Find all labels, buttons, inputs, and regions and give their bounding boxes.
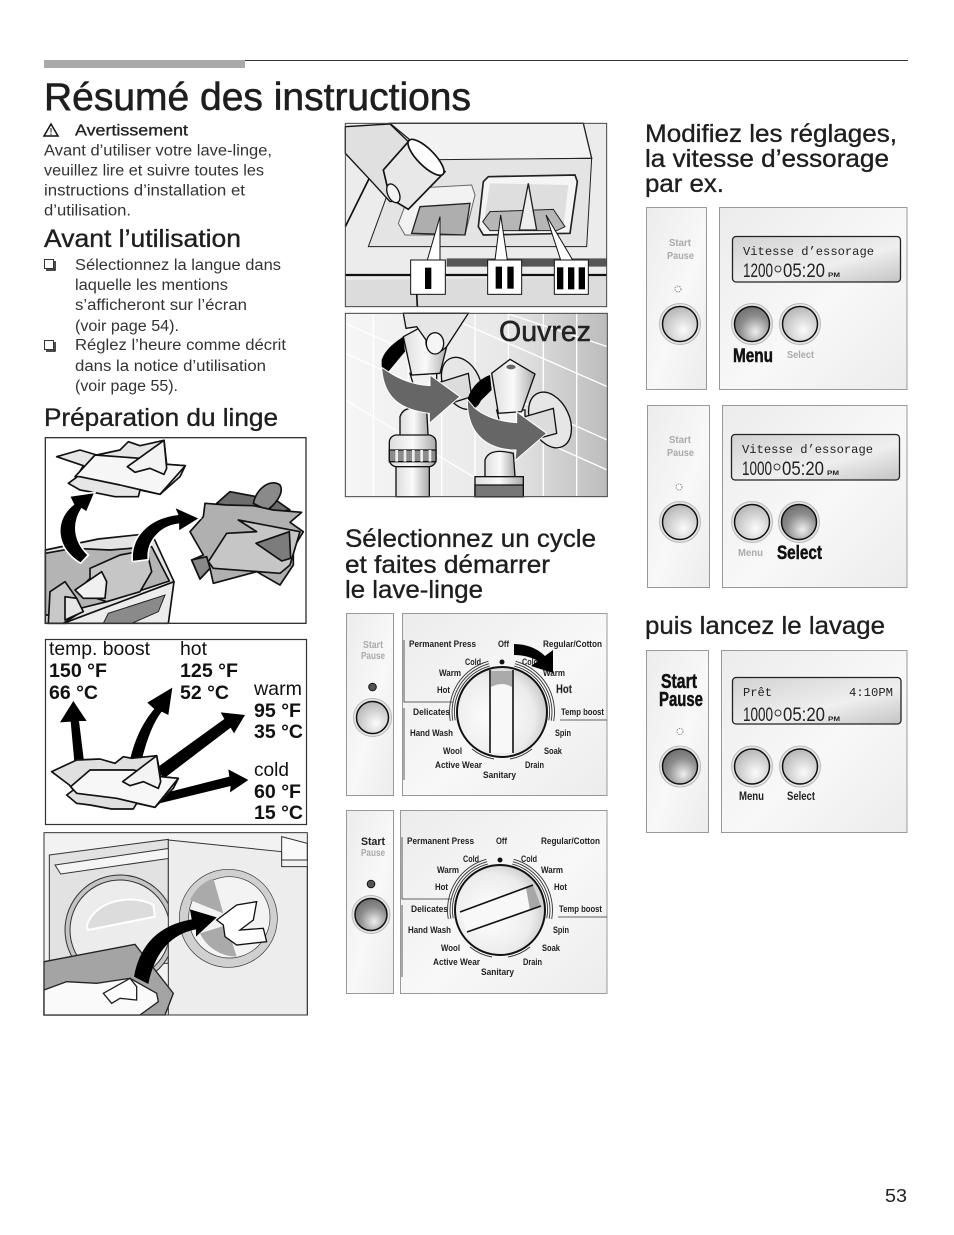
heading: sélectionnez un cycle: Sélectionnez un cycle xyxy=(345,525,596,553)
dial panel: Cold xyxy=(463,854,479,865)
dial panel: Off xyxy=(496,836,508,847)
label: warm: 95 °F xyxy=(254,700,301,722)
warning text block: d’utilisation. xyxy=(44,202,131,220)
dial panel: Warm xyxy=(541,865,563,876)
illustration: sorting laundry xyxy=(45,438,306,623)
display: Vitesse d’essorage xyxy=(742,443,873,457)
panel: spin speed, menu pressed xyxy=(646,208,907,390)
dial knob xyxy=(448,858,552,957)
dial knob xyxy=(450,660,554,759)
label: cold: 60 °F xyxy=(254,781,301,803)
heading: avant l'utilisation: Avant l’utilisation xyxy=(44,225,241,253)
label: cold xyxy=(254,759,303,824)
illustration: open taps xyxy=(345,313,607,497)
dial panel: Permanent Press xyxy=(409,639,476,650)
dial panel: Soak xyxy=(542,943,561,954)
header rule xyxy=(44,60,908,68)
label: cold: cold xyxy=(254,759,289,781)
white laundry pile xyxy=(57,440,185,497)
checklist xyxy=(44,257,287,395)
arrow: to coloured pile xyxy=(132,507,200,562)
left tap xyxy=(389,313,490,497)
display: PM xyxy=(827,470,839,477)
start pause strip: Pause xyxy=(361,847,385,859)
checklist: (voir page 55). xyxy=(75,378,178,395)
control panel: Select xyxy=(787,349,814,361)
label: hot: hot xyxy=(180,638,208,660)
arrow: left turn xyxy=(382,337,460,423)
label: temp boost: temp. boost xyxy=(49,638,151,660)
checklist: dans la notice d’utilisation xyxy=(75,358,266,375)
dial panel: Hot xyxy=(435,882,449,893)
display: PM xyxy=(828,716,840,723)
label: ouvrez: Ouvrez xyxy=(499,316,591,348)
dial panel: Cold xyxy=(521,854,537,865)
dark strip lines xyxy=(447,258,607,267)
dial panel: Regular/Cotton xyxy=(541,836,600,847)
dial panel: Temp boost xyxy=(561,707,605,718)
label: hot xyxy=(180,638,238,704)
warning text block: Avertissement xyxy=(75,122,189,140)
dial panel: Warm xyxy=(439,668,461,679)
dial panel xyxy=(400,810,607,994)
display: 4:10PM xyxy=(849,686,893,700)
dial panel: Spin xyxy=(553,925,569,936)
start pause strip xyxy=(648,406,710,588)
dial panel: Hand Wash xyxy=(410,728,453,739)
dial panel: Hot xyxy=(556,682,572,696)
checklist: Sélectionnez la langue dans xyxy=(75,257,281,274)
washer front and drum xyxy=(168,840,307,1015)
compartment I xyxy=(398,185,475,235)
dial panel: Active Wear xyxy=(435,760,482,771)
illustration: detergent drawer xyxy=(345,123,607,307)
control panel: Select xyxy=(777,543,823,564)
label: temp boost: 150 °F xyxy=(49,660,107,682)
illustration: loading the washer xyxy=(44,833,307,1015)
compartments II and III xyxy=(478,175,577,235)
dial panel: Wool xyxy=(443,746,462,757)
control panel xyxy=(720,208,907,390)
dial panel: Regular/Cotton xyxy=(543,639,602,650)
hand and cup xyxy=(345,124,408,202)
dial panel: Hot xyxy=(437,685,451,696)
display: 05:20 xyxy=(782,459,824,480)
panel: start wash xyxy=(646,650,907,832)
display: PM xyxy=(828,272,840,279)
label: hot: 52 °C xyxy=(180,682,229,704)
dial panel: Soak xyxy=(544,746,563,757)
panel: spin speed, select pressed xyxy=(648,406,907,588)
page number: 53 xyxy=(885,1186,907,1206)
dial panel xyxy=(402,614,607,796)
display: Prêt xyxy=(743,686,772,700)
dial panel: Temp boost xyxy=(559,904,603,915)
display xyxy=(732,236,900,282)
dial panel: Hand Wash xyxy=(408,925,451,936)
label: warm xyxy=(253,678,303,743)
warning text block: instructions d’installation et xyxy=(44,182,246,200)
heading: préparation du linge: Préparation du linge xyxy=(44,404,278,432)
dial panel: Warm xyxy=(543,668,565,679)
arrow: select hot xyxy=(514,644,553,673)
coloured laundry pile xyxy=(190,483,303,585)
heading: sélectionnez un cycle: et faites démarrer xyxy=(345,551,550,579)
laundry basket xyxy=(45,533,174,623)
callout: compartment III xyxy=(546,215,588,294)
arrow: to white pile xyxy=(60,492,95,563)
control panel: Menu xyxy=(739,791,764,803)
control panel: Menu xyxy=(733,346,773,367)
start pause strip: Start xyxy=(669,434,691,446)
heading: modifiez les réglages xyxy=(645,120,897,198)
start pause strip: Start xyxy=(361,836,385,848)
dial panel: Cold xyxy=(465,657,481,668)
dial panel: Permanent Press xyxy=(407,836,474,847)
control panel xyxy=(722,650,907,832)
start pause strip xyxy=(346,614,394,796)
start pause strip: Start xyxy=(363,639,383,651)
heading: puis lancez le lavage: puis lancez le lavage xyxy=(645,612,885,640)
heading: modifiez les réglages: Modifiez les réglages, xyxy=(645,120,897,148)
dial panel: Sanitary xyxy=(483,770,517,781)
temperature arrows and laundry xyxy=(52,688,248,809)
heading: modifiez les réglages: par ex. xyxy=(645,170,724,198)
start pause strip: Start xyxy=(661,671,697,693)
control panel xyxy=(722,406,907,588)
heading: modifiez les réglages: la vitesse d’essorage xyxy=(645,145,889,173)
dial panel: Active Wear xyxy=(433,957,480,968)
panel: cycle dial with start pause, first state xyxy=(346,614,607,796)
label: temp boost: 66 °C xyxy=(49,682,98,704)
start pause strip xyxy=(646,650,708,832)
dial panel: Off xyxy=(498,639,510,650)
display: 05:20 xyxy=(783,261,825,282)
start pause strip xyxy=(646,208,706,390)
wall tiles xyxy=(345,313,607,497)
checklist: Réglez l’heure comme décrit xyxy=(75,337,287,354)
label: warm: warm xyxy=(253,678,302,700)
start pause strip xyxy=(346,810,394,994)
warning text block xyxy=(44,122,272,220)
label: warm: 35 °C xyxy=(254,721,303,743)
dial panel: Warm xyxy=(437,865,459,876)
dial panel: Drain xyxy=(525,760,544,771)
basket mesh xyxy=(103,595,165,623)
start pause strip: Start xyxy=(669,237,691,249)
warning text block: veuillez lire et suivre toutes les xyxy=(44,162,264,180)
dial panel: Sanitary xyxy=(481,967,515,978)
callout: compartment II xyxy=(488,215,522,294)
heading: sélectionnez un cycle xyxy=(345,525,596,604)
control panel: Menu xyxy=(738,547,763,559)
start pause strip: Pause xyxy=(361,650,385,662)
display: 05:20 xyxy=(783,705,825,726)
dial panel: Spin xyxy=(555,728,571,739)
dial panel: Hot xyxy=(554,882,568,893)
dial panel: Delicates xyxy=(411,904,448,915)
checklist: laquelle les mentions xyxy=(75,277,228,294)
dial panel: Wool xyxy=(441,943,460,954)
warning text block: Avant d’utiliser votre lave-linge, xyxy=(44,142,272,160)
heading: sélectionnez un cycle: le lave-linge xyxy=(345,576,483,604)
panel: cycle dial with start pause, second state xyxy=(346,810,607,994)
display xyxy=(732,678,901,726)
dial panel: Delicates xyxy=(413,707,450,718)
start pause strip: Pause xyxy=(667,250,694,262)
callout: compartment I xyxy=(411,217,445,294)
icon: warning triangle xyxy=(44,124,58,136)
checklist: (voir page 54). xyxy=(75,318,179,335)
display: 1000 xyxy=(742,459,772,480)
display: 1000 xyxy=(743,705,773,726)
checklist: s’afficheront sur l’écran xyxy=(75,297,247,314)
start pause strip: Pause xyxy=(667,447,694,459)
washer top xyxy=(390,123,592,161)
display: Vitesse d’essorage xyxy=(743,245,874,259)
arrow: into drum xyxy=(134,909,217,984)
control panel: Select xyxy=(787,791,815,803)
display xyxy=(732,434,900,480)
arrow: right turn xyxy=(467,375,547,461)
start pause strip: Pause xyxy=(659,689,703,711)
title: Résumé des instructions xyxy=(44,76,471,119)
label: hot: 125 °F xyxy=(180,660,238,682)
display: 1200 xyxy=(743,261,773,282)
laundry basket xyxy=(44,944,173,1015)
dial panel: Drain xyxy=(523,957,542,968)
dial panel: Cold xyxy=(522,657,538,668)
open door xyxy=(49,839,175,985)
illustration: temperature chart xyxy=(46,638,306,824)
label: cold: 15 °C xyxy=(254,802,303,824)
right tap xyxy=(475,359,580,497)
label: temp boost xyxy=(49,638,151,704)
